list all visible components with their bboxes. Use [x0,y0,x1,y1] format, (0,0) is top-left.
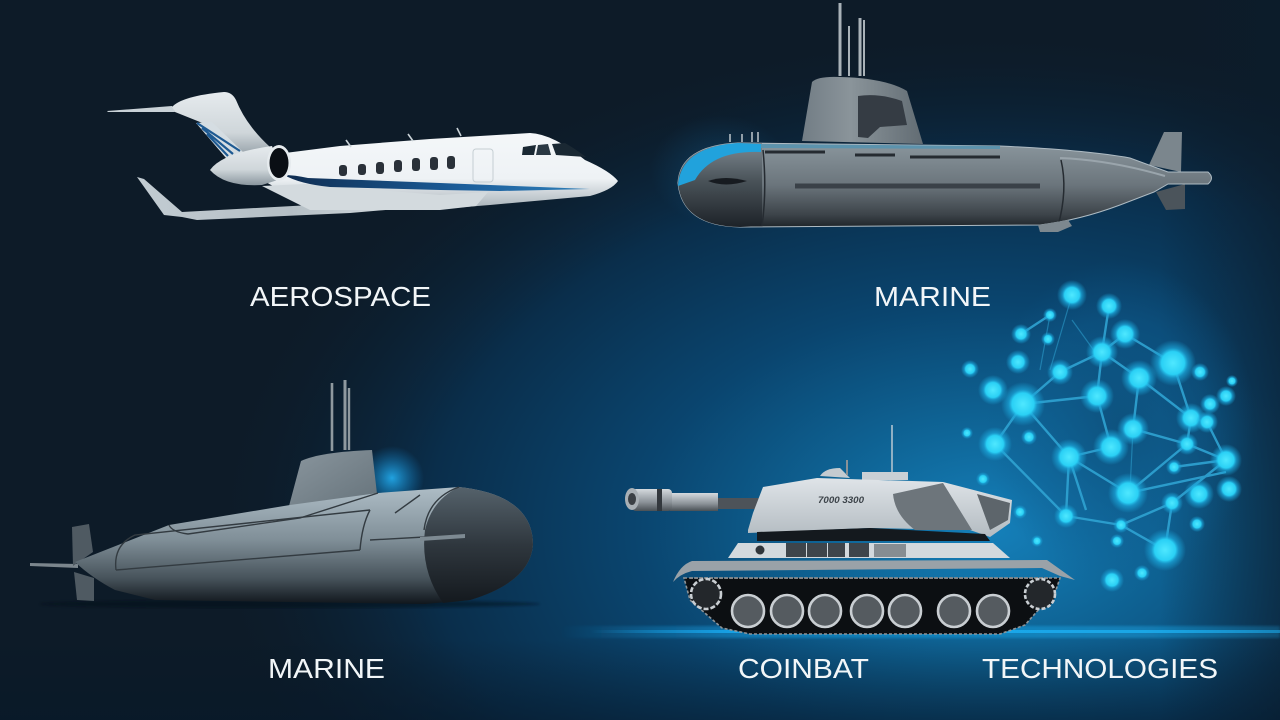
icon: submarine hull [678,143,1212,227]
icon: submarine blue nose highlight [678,143,761,186]
icon: tank antenna [891,425,893,477]
icon: tank hatch details [820,460,908,480]
icon: jet antennas [346,128,461,147]
icon: tank road wheels [691,579,1055,627]
icon: jet belly fairing [262,184,488,210]
blue deck highlight [761,144,1000,149]
icon: submarine deck fittings [730,132,758,142]
icon: jet engine [210,145,291,185]
icon: jet tailplane and fin [107,92,270,160]
icon: tank rear panel [977,494,1010,530]
label: MARINE top: MARINE [874,281,991,312]
icon: submarine bow plane [420,534,465,541]
label: MARINE bottom: MARINE [268,653,385,684]
icon: submarine tail fins [30,524,94,601]
tank turret marking: 7000 3300 [818,495,864,505]
icon: submarine sail [802,77,923,144]
network links [995,295,1226,550]
icon: submarine hull panel lines [116,487,460,570]
icon: tank upper hull [728,543,1010,558]
icon: submarine bow slot [708,178,747,184]
nose glow [650,115,790,225]
icon: tank turret [748,478,1012,537]
icon: submarine masts [332,380,349,451]
icon: tank track upper run [690,577,1050,579]
floor shadow [40,600,540,608]
sail glow [360,446,424,510]
icon: jet fuselage [262,133,618,209]
submarine illustration: bottom left [30,380,540,608]
icon: submarine tail fins [1149,132,1185,210]
label: TECHNOLOGIES: TECHNOLOGIES [982,653,1218,684]
network halo [985,260,1255,590]
submarine illustration: top right [650,3,1212,232]
icon: submarine sail [289,450,377,506]
icon: submarine hull section lines [762,150,1165,226]
airplane illustration [107,92,618,220]
icon: tank fender [673,560,1075,582]
icon: jet cabin windows [339,156,455,176]
neural network illustration [961,260,1255,592]
label: COINBAT: COINBAT [738,653,869,684]
icon: tank turret dark panel [893,483,972,530]
icon: submarine nose [678,143,762,227]
network nodes [961,280,1242,592]
icon: jet cockpit [522,143,586,157]
icon: submarine keel fin [1038,220,1072,232]
floor light line [560,626,1280,638]
label: AEROSPACE: AEROSPACE [250,281,431,312]
icon: tank track [684,578,1060,634]
icon: tank gun barrel [625,488,785,511]
icon: jet wing [137,177,445,220]
tank illustration [625,425,1075,634]
icon: turret ring [757,528,990,541]
icon: submarine hull [75,487,533,604]
icon: jet livery stripe [284,175,590,191]
icon: submarine masts [840,3,864,76]
icon: submarine dark nose [424,487,533,603]
icon: jet door [473,149,493,182]
